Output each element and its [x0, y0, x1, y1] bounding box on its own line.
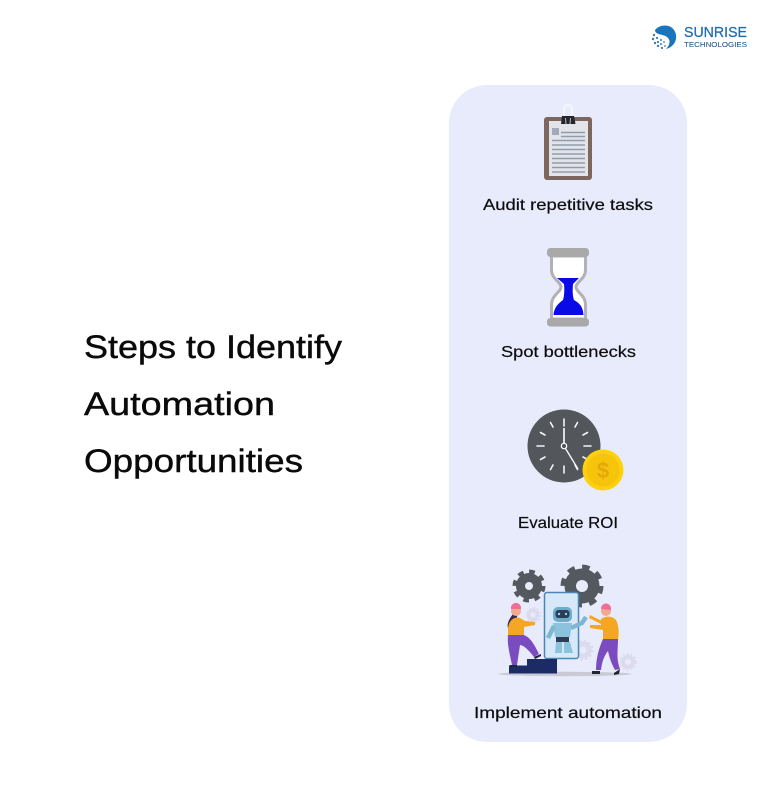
panel: steps	[449, 85, 687, 742]
icon: clock and coin: $	[597, 458, 609, 483]
panel background	[449, 85, 687, 742]
label: implement automation: Implement automation	[474, 705, 662, 722]
logo wordmark: SUNRISE	[684, 24, 747, 41]
logo tagline: TECHNOLOGIES	[684, 40, 747, 49]
label: evaluate ROI: Evaluate ROI	[518, 515, 618, 532]
title: Opportunities	[84, 443, 303, 479]
title: Automation	[84, 386, 275, 422]
person: left	[508, 603, 541, 667]
title: Steps to Identify	[84, 329, 342, 365]
icon: clock and coin	[528, 410, 624, 490]
label: audit repetitive tasks: Audit repetitive tasks	[483, 197, 653, 214]
robot	[548, 607, 586, 653]
person: right	[589, 603, 620, 675]
logo mark	[652, 26, 676, 49]
icon: hourglass	[547, 248, 589, 326]
title	[84, 329, 342, 479]
ground shadow	[498, 672, 632, 676]
gear: left	[514, 572, 544, 600]
faint background gears	[527, 608, 636, 670]
label: spot bottlenecks: Spot bottlenecks	[501, 344, 636, 361]
logo: Sunrise Technologies	[652, 24, 747, 49]
gear: right	[563, 567, 601, 605]
icon: clipboard	[544, 105, 592, 180]
illustration: team building robot	[498, 567, 636, 676]
stairs	[509, 659, 557, 674]
tablet screen	[544, 592, 578, 658]
